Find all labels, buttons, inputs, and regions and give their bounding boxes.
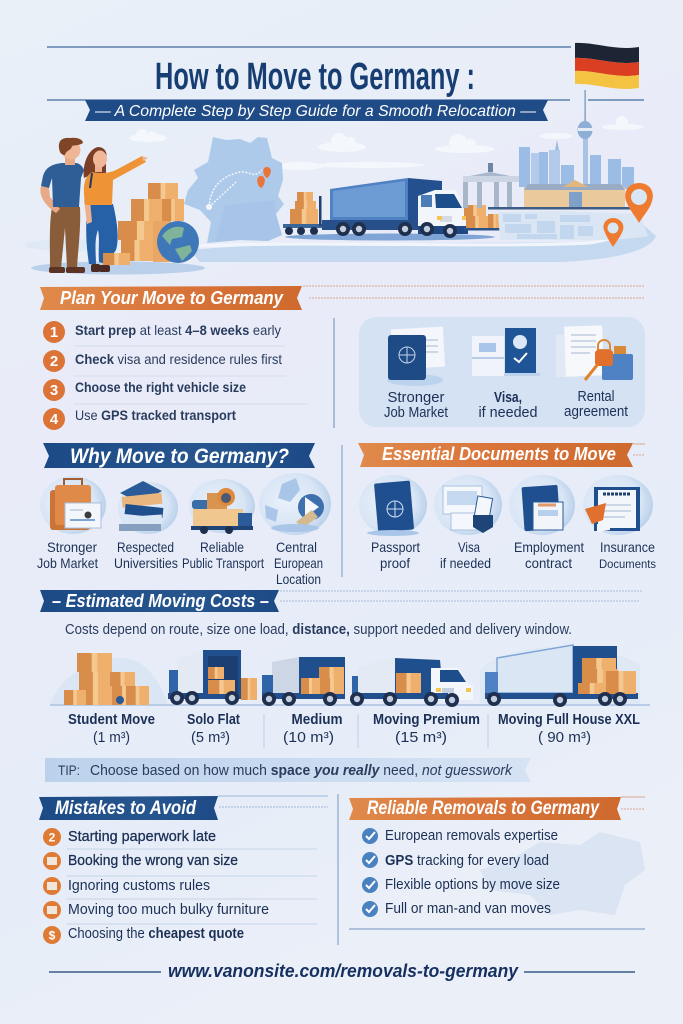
icon: insurance documents [583, 475, 653, 535]
mistakes list: Choosing the cheapest quote [68, 926, 244, 942]
vehicle labels: ( 90 m³) [538, 730, 591, 746]
numbered list: 1 [50, 324, 58, 341]
woman [84, 147, 148, 272]
mistakes list: Starting paperwork late [68, 829, 216, 845]
reliable heading: Reliable Removals to Germany [367, 798, 600, 819]
why labels: Universities [114, 555, 178, 571]
hero illustration [25, 90, 656, 274]
TV tower [578, 90, 593, 185]
benefits list: Full or man-and van moves [385, 901, 551, 917]
street map [498, 211, 648, 240]
pin hole [631, 189, 647, 205]
mistakes heading [39, 796, 328, 820]
documents panel: Stronger [388, 389, 444, 406]
full house lorry [485, 645, 638, 707]
mistakes list: $ [49, 928, 56, 942]
vehicle labels: Medium [292, 712, 342, 728]
couple [40, 138, 148, 273]
subtitle ribbon: — A Complete Step by Step Guide for a Smooth Relocattion — [94, 103, 537, 120]
numbered list [43, 321, 308, 430]
mistakes list: Booking the wrong van size [68, 853, 238, 869]
why heading: Why Move to Germany? [70, 445, 289, 468]
Germany map [184, 137, 284, 243]
palace [524, 180, 625, 207]
mistakes list [43, 828, 317, 944]
plan heading [40, 286, 645, 310]
icon: passport [387, 327, 445, 386]
documents labels [371, 539, 656, 571]
clouds [129, 116, 644, 170]
numbered list: Use GPS tracked transport [75, 407, 236, 423]
costs heading [40, 590, 642, 612]
documents labels: Documents [599, 557, 656, 571]
mistakes list: 2 [49, 830, 56, 844]
numbered list: Choose the right vehicle size [75, 379, 246, 395]
icon: visa [472, 328, 540, 376]
faint background map [480, 832, 645, 915]
tip banner: TIP: [58, 762, 80, 778]
documents labels: Employment [514, 539, 584, 555]
documents panel [359, 317, 645, 427]
documents labels: Insurance [600, 539, 655, 555]
section: estimated moving costs [40, 590, 650, 782]
why labels [37, 539, 323, 587]
documents labels: if needed [440, 555, 491, 571]
man [40, 138, 85, 273]
stacked boxes [103, 183, 184, 265]
icon: rental agreement [556, 325, 633, 380]
documents panel: Rental [578, 388, 614, 405]
documents panel: if needed [478, 404, 538, 421]
mistakes list: Ignoring customs rules [68, 878, 210, 894]
vehicle labels: Moving Full House XXL [498, 712, 640, 728]
documents heading: Essential Documents to Move [382, 443, 616, 464]
section: mistakes to avoid [39, 796, 328, 944]
why labels: Respected [117, 539, 174, 555]
Brandenburg gate [463, 163, 519, 208]
icon: visa document [434, 475, 502, 535]
icon: public transport [189, 479, 255, 534]
icon: universities [118, 481, 178, 534]
benefits list: European removals expertise [385, 828, 558, 844]
numbered list: 4 [50, 411, 59, 428]
numbered list: Start prep at least 4–8 weeks early [75, 322, 281, 338]
icon: employment contract [509, 475, 575, 535]
pallet boxes [464, 205, 507, 230]
mistakes list: Moving too much bulky furniture [68, 902, 269, 918]
numbered list: 3 [50, 382, 58, 399]
globe [157, 221, 199, 263]
tip banner [45, 758, 531, 782]
plan heading: Plan Your Move to Germany [60, 287, 285, 308]
section: why move [37, 443, 331, 587]
mistakes heading: Mistakes to Avoid [55, 798, 196, 819]
large location pin [625, 183, 653, 223]
numbered list: 2 [50, 353, 58, 370]
premium lorry [350, 657, 473, 707]
lorry [285, 178, 495, 240]
section: plan your move [40, 286, 645, 430]
documents panel: Visa, [494, 389, 522, 406]
benefits list: GPS tracking for every load [385, 853, 549, 869]
medium van [262, 657, 345, 706]
section: reliable removals [349, 797, 645, 929]
icon: job market [40, 476, 106, 534]
vehicle labels: (10 m³) [283, 730, 334, 746]
documents panel: Job Market [384, 404, 449, 421]
vehicle row [50, 645, 650, 707]
student move boxes [64, 653, 149, 705]
why labels: Central [276, 539, 317, 555]
why labels: Stronger [47, 539, 97, 555]
why labels: Reliable [200, 539, 244, 555]
flatbed trailer with boxes [283, 192, 331, 235]
icon: central location globe [259, 473, 331, 535]
title: How to Move to Germany : [155, 56, 475, 98]
vehicle labels: (1 m³) [93, 730, 130, 746]
vehicle labels: (15 m³) [395, 730, 447, 746]
numbered list: Check visa and residence rules first [75, 351, 282, 367]
city skyline [463, 90, 648, 210]
why labels: Public Transport [182, 555, 264, 571]
benefits list [362, 828, 560, 917]
documents labels: Passport [371, 539, 420, 555]
tip banner: Choose based on how much space you really need, not guesswork [90, 763, 513, 779]
flag of Germany [575, 43, 639, 89]
vehicle labels: Moving Premium [373, 712, 480, 728]
costs intro text: Costs depend on route, size one load, distance, support needed and delivery window. [65, 622, 572, 638]
benefits list: Flexible options by move size [385, 877, 560, 893]
road band [190, 222, 656, 262]
section: essential documents [358, 443, 656, 571]
vehicle labels: Solo Flat [187, 712, 240, 728]
solo flat van [168, 650, 257, 705]
why labels: Location [276, 571, 321, 587]
documents labels: proof [380, 555, 410, 571]
small location pin [603, 218, 623, 247]
documents labels: Visa [458, 539, 480, 555]
documents panel: agreement [564, 403, 629, 420]
costs heading: – Estimated Moving Costs – [52, 590, 269, 611]
documents labels: contract [525, 555, 572, 571]
vehicle labels [68, 712, 640, 748]
icon: passport proof [359, 475, 427, 536]
footer url: www.vanonsite.com/removals-to-germany [168, 960, 520, 981]
small pin hole [608, 222, 618, 234]
vehicle labels: Student Move [68, 712, 155, 728]
vehicle labels: (5 m³) [191, 730, 230, 746]
why labels: Job Market [37, 555, 98, 571]
why labels: European [274, 555, 323, 571]
